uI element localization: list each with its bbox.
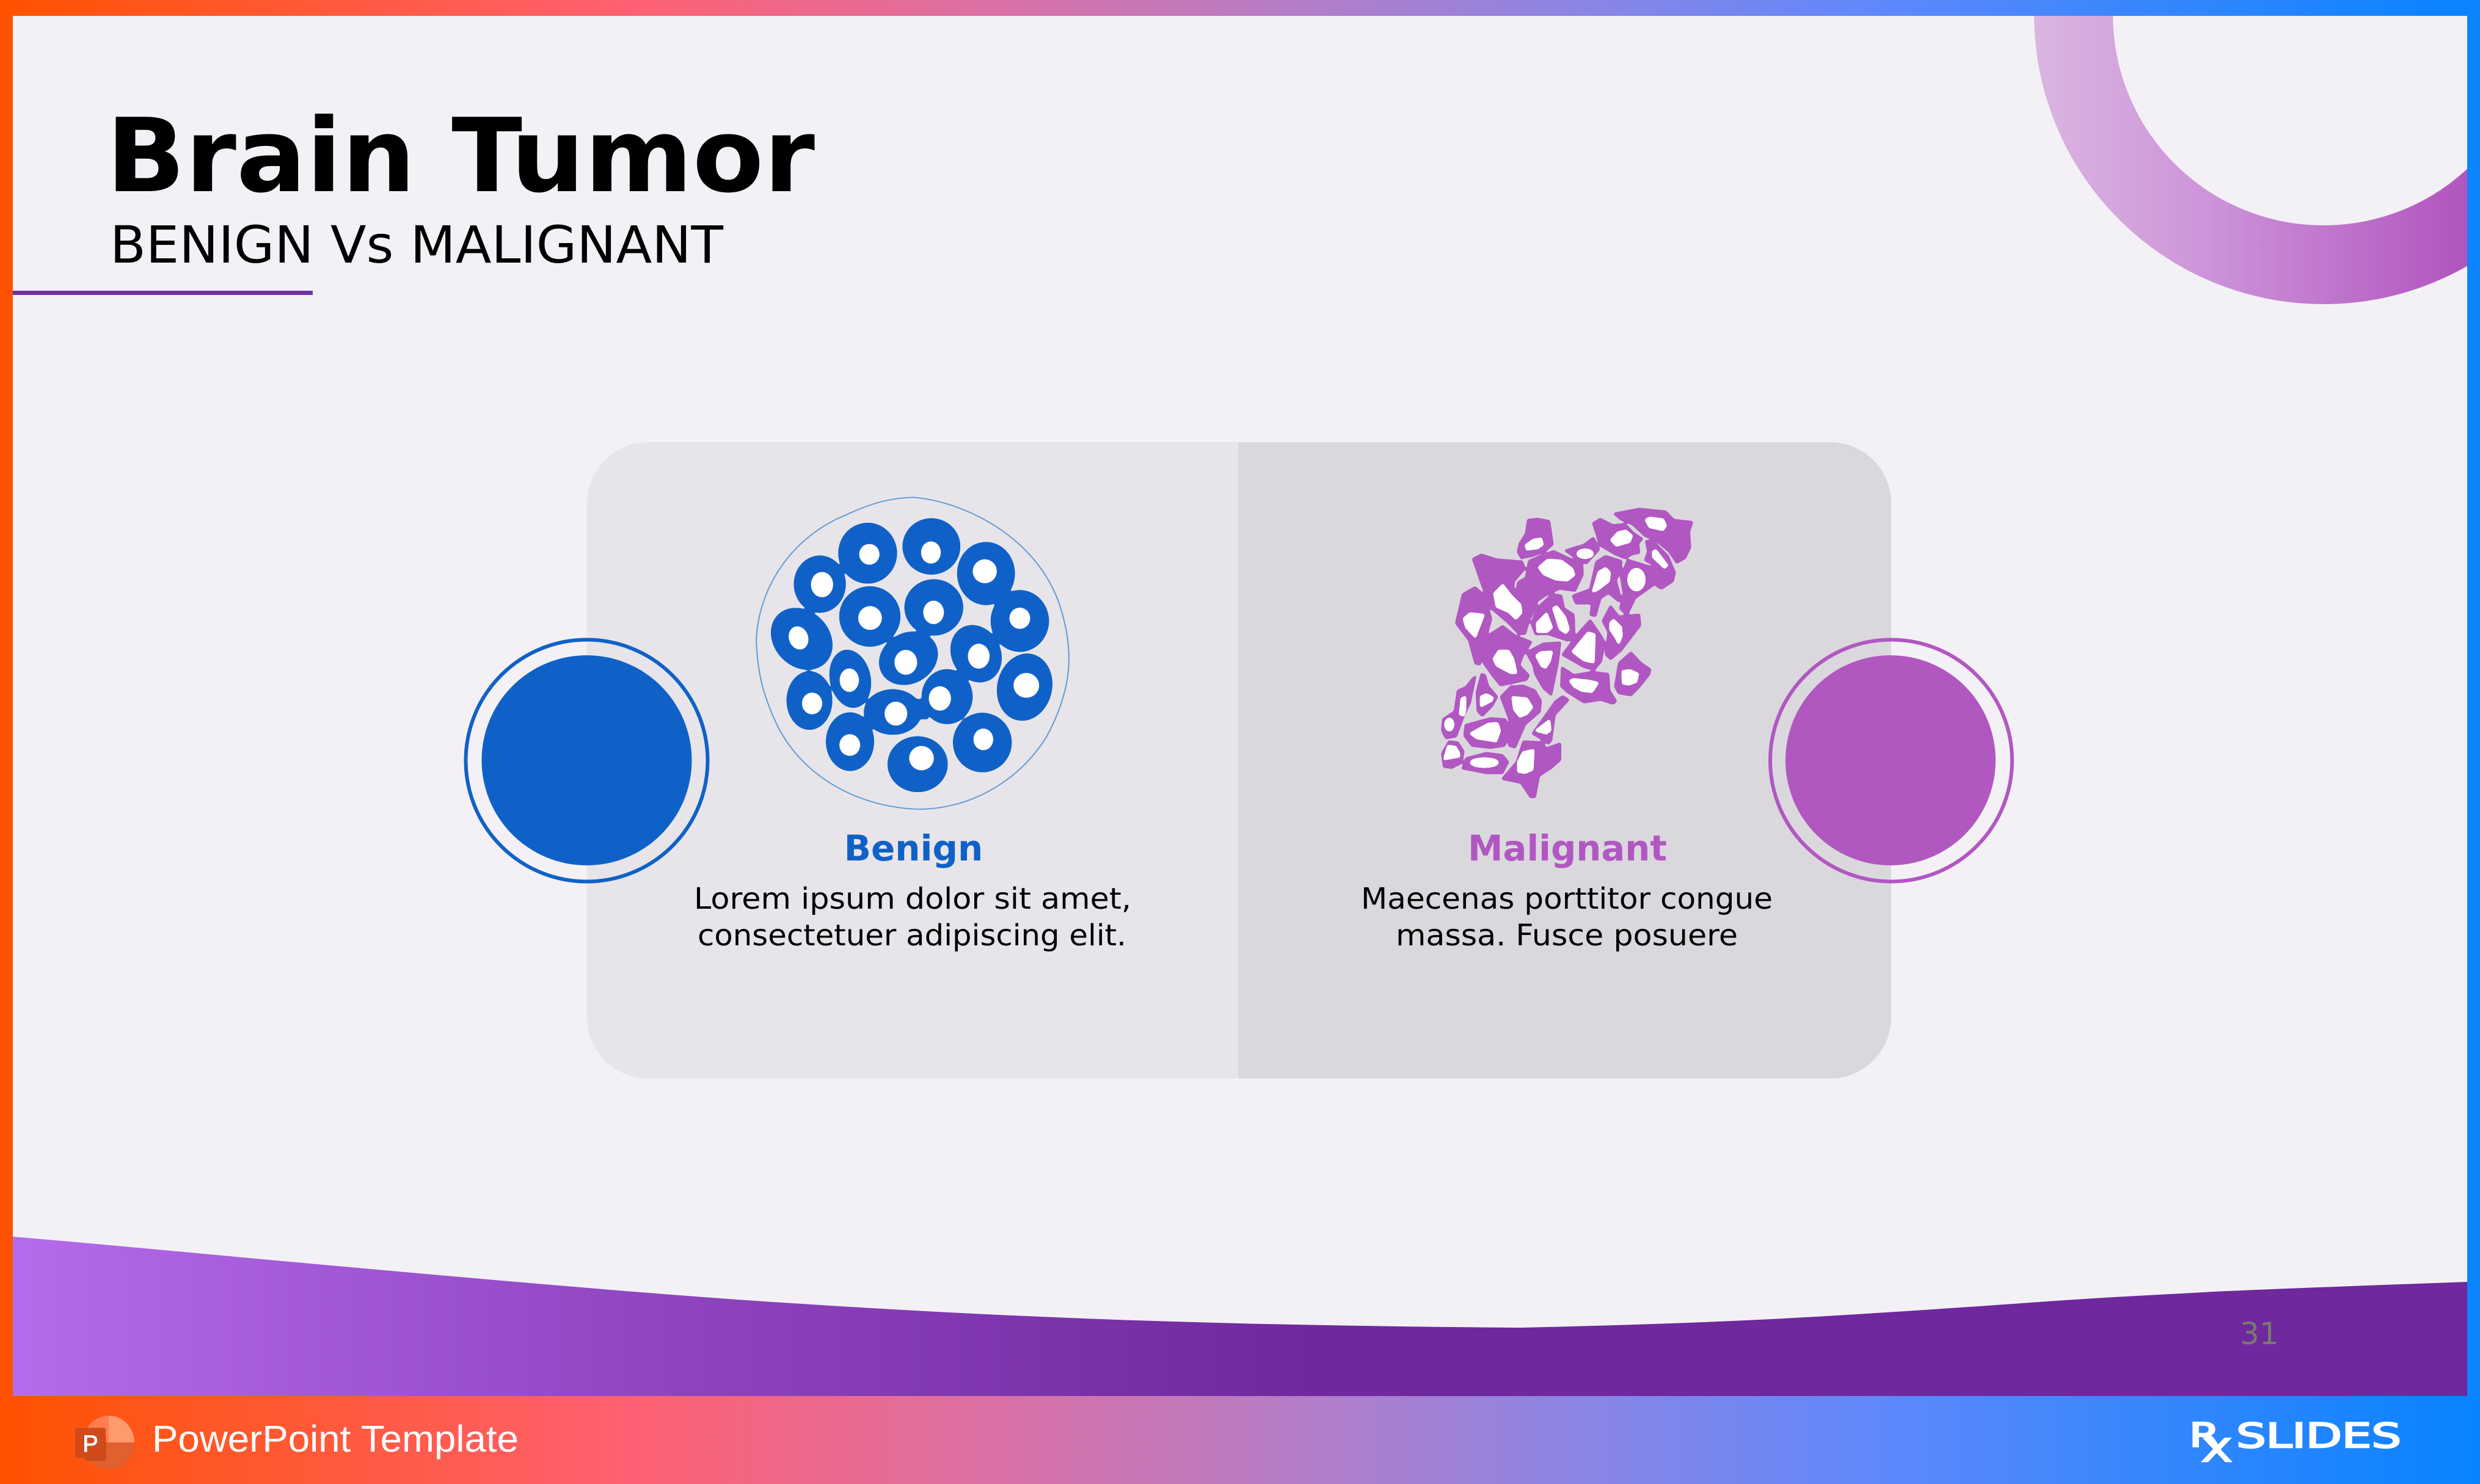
panel: malignant side	[1238, 442, 1891, 1078]
footer label: PowerPoint Template	[152, 1418, 519, 1460]
footer gradient bar	[0, 1396, 2480, 1484]
decorative ring top right	[2073, 0, 2480, 265]
panel: comparison card	[587, 442, 1891, 1078]
malignant description	[1361, 882, 1773, 953]
bottom wave	[13, 1237, 2467, 1399]
icon: benign cells	[756, 497, 1069, 809]
malignant heading: Malignant	[1468, 827, 1667, 869]
logo: RxSlides: SLIDES	[2236, 1416, 2401, 1455]
icon: PowerPoint logo	[75, 1416, 134, 1469]
malignant description: Maecenas porttitor congue	[1361, 882, 1773, 916]
panel: benign side	[587, 442, 1238, 1078]
top gradient bar	[0, 0, 2480, 16]
benign description: consectetuer adipiscing elit.	[698, 918, 1126, 953]
left frame bar	[0, 0, 13, 1484]
right frame bar	[2467, 0, 2480, 1484]
page number: 31	[2240, 1316, 2279, 1351]
icon: malignant circle	[1770, 640, 2012, 882]
malignant description: massa. Fusce posuere	[1396, 918, 1738, 953]
logo: RxSlides: R	[2189, 1416, 2220, 1455]
icon: malignant cells	[1442, 509, 1692, 797]
logo: RxSlides	[2189, 1416, 2401, 1469]
title: Brain Tumor	[106, 97, 815, 216]
subtitle: BENIGN Vs MALIGNANT	[110, 215, 724, 275]
icon: PowerPoint logo: P	[82, 1431, 98, 1457]
benign heading: Benign	[844, 827, 983, 869]
icon: benign circle	[465, 640, 707, 882]
benign description: Lorem ipsum dolor sit amet,	[694, 882, 1131, 916]
title underline	[13, 291, 313, 295]
benign description	[694, 882, 1131, 953]
logo: RxSlides: X	[2201, 1433, 2232, 1469]
